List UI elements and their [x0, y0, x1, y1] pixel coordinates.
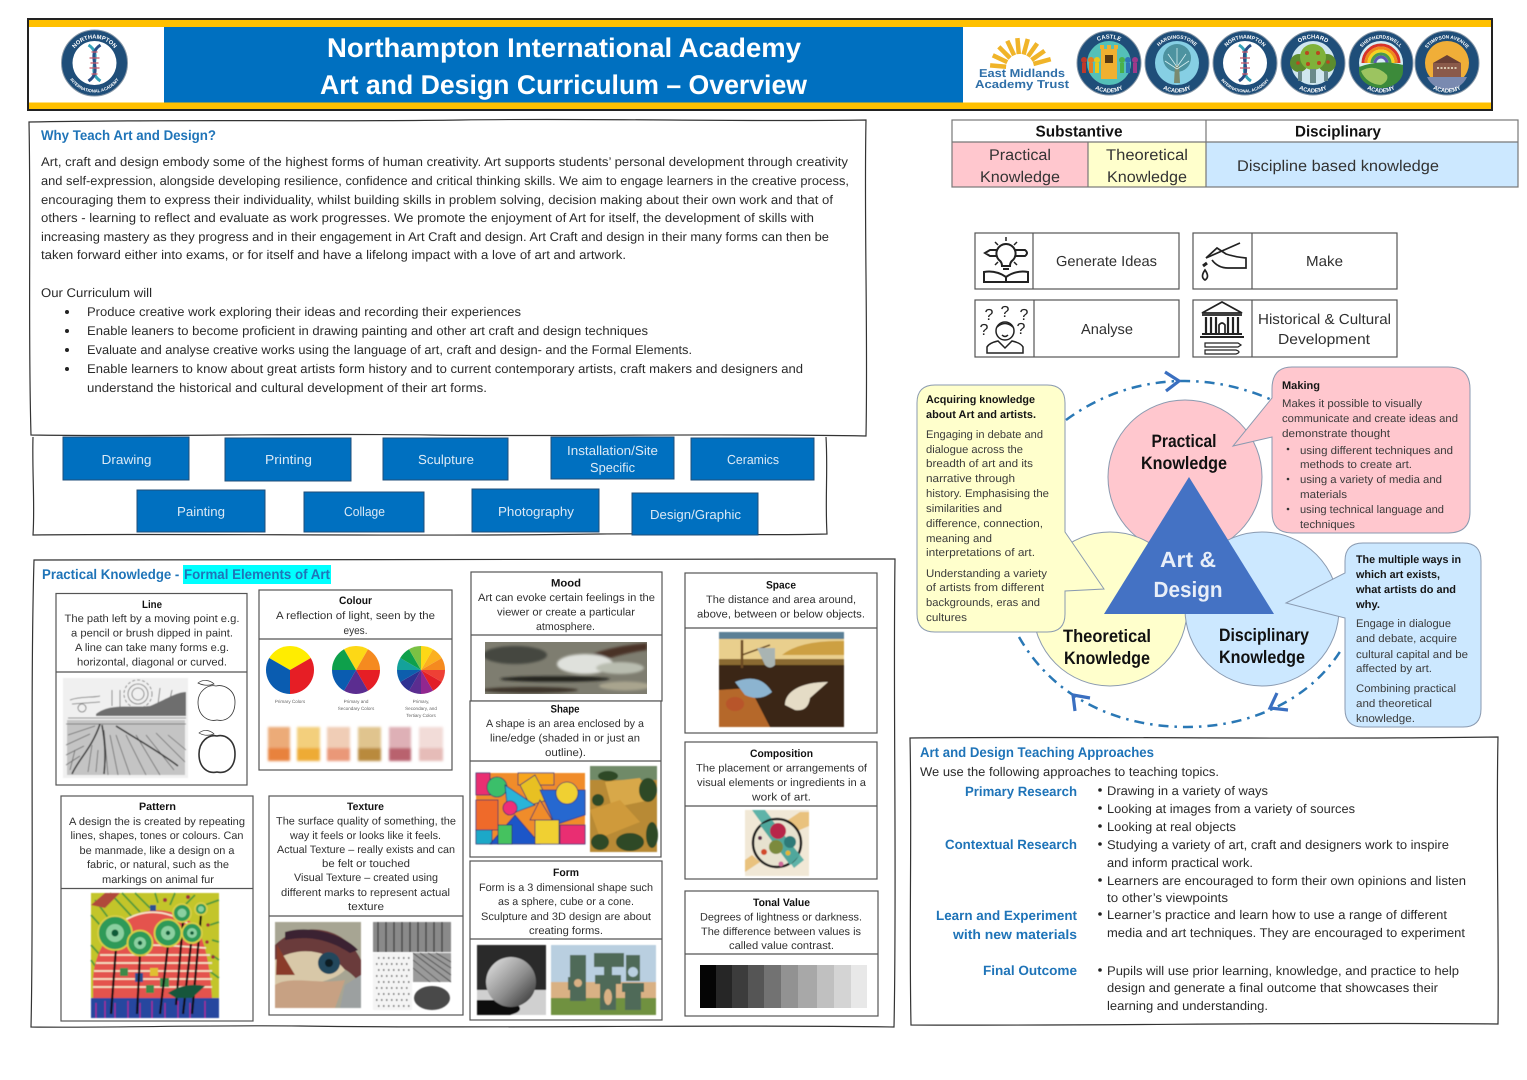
logo: Shepherdswell Academy	[1348, 30, 1414, 96]
card: mood: Art can evoke certain feelings in the	[478, 592, 655, 604]
button: installation/site specific: Installation/Site	[567, 443, 658, 458]
card: texture: be felt or touched	[322, 858, 410, 870]
card: tonal value: Tonal Value	[753, 897, 810, 909]
text block: rationale: and self-expression, alongside developing resilience, confidence and critical thinking skills. We aim to engage learners in the creative process,	[41, 174, 849, 188]
callout: multiple ways art exists: Combining practical	[1356, 683, 1456, 695]
card: space: The distance and area around,	[706, 594, 856, 606]
button: installation/site specific	[551, 437, 674, 479]
panel: generate ideas	[975, 233, 1179, 289]
card: line: A line can take many forms e.g.	[75, 642, 229, 654]
text block: our curriculum will: Enable learners to know about great artists form history and to current contemporary artists, craft makers and designers and	[87, 362, 803, 376]
card: tonal value	[685, 891, 878, 1016]
callout: acquiring knowledge: similarities and	[926, 503, 1002, 515]
button: design/graphic	[632, 493, 758, 535]
callout: making: Making	[1282, 380, 1320, 392]
image: bronze sculpture group in field	[551, 945, 656, 1015]
text block: rationale: others - learning to reflect and evaluate as work progresses. We promote the enjoyment of Art for itself, the development of skills with	[41, 211, 814, 225]
callout: making: methods to create art.	[1300, 459, 1412, 471]
title	[320, 33, 808, 100]
triangle: art and design: Art &	[1160, 547, 1216, 572]
callout: acquiring knowledge	[917, 385, 1104, 632]
logo: East Midlands Academy Trust: Academy Trust	[975, 79, 1069, 91]
triangle: art and design	[1104, 477, 1274, 614]
table: knowledge types: Disciplinary	[1295, 124, 1381, 140]
text block: rationale: increasing mastery as they progress and in their engagement in Art Craft and design. Art Craft and design in their many forms can then be	[41, 230, 829, 244]
card: line: a pencil or brush dipped in paint.	[71, 628, 233, 640]
callout: making: techniques	[1300, 519, 1356, 531]
colour wheel captions: Primary Colors	[275, 699, 306, 704]
card: line: horizontal, diagonal or curved.	[77, 656, 227, 668]
callout: acquiring knowledge: backgrounds, eras and	[926, 597, 1040, 609]
logo: Northampton Academy	[1212, 30, 1278, 96]
button: ceramics: Ceramics	[727, 452, 779, 467]
heading: formal elements: Formal Elements of Art	[184, 566, 330, 582]
card: pattern: markings on animal fur	[102, 874, 214, 886]
approach descriptions: Learner’s practice and learn how to use a range of different	[1107, 908, 1448, 922]
image: apple outlines	[198, 680, 235, 772]
card: texture	[269, 796, 463, 1015]
card: mood: viewer or create a particular	[497, 606, 635, 618]
callout: multiple ways art exists: affected by art.	[1356, 663, 1432, 675]
image: stormy seascape painting	[482, 642, 651, 694]
panel: make: Make	[1306, 254, 1343, 270]
button: installation/site specific: Specific	[590, 460, 635, 475]
panel: art forms	[33, 437, 827, 535]
approach descriptions	[1098, 784, 1466, 1013]
button: printing	[225, 438, 351, 481]
button: drawing: Drawing	[102, 452, 152, 467]
card: form: as a sphere, cube or a cone.	[498, 896, 634, 908]
button: printing: Printing	[265, 452, 312, 467]
circle: theoretical knowledge: Knowledge	[1064, 648, 1150, 668]
image: pencil colour swatches	[268, 727, 443, 761]
text block: our curriculum will: Our Curriculum will	[41, 286, 152, 300]
callout: multiple ways art exists: and debate, acquire	[1356, 633, 1457, 645]
button: design/graphic: Design/Graphic	[650, 507, 741, 522]
table: knowledge types: Theoretical	[1106, 147, 1188, 164]
panel: historical and cultural development	[1193, 300, 1397, 357]
logo: Northampton Academy: INTERNATIONAL ACADEMY	[1221, 78, 1268, 92]
text: introduction: We use the following approaches to teaching topics.	[920, 765, 1219, 779]
icon: primary colour wheel	[266, 646, 314, 694]
icon: secondary colour wheel	[332, 646, 380, 694]
callout: multiple ways art exists: and theoretical	[1356, 698, 1432, 710]
image: colourful abstract shapes	[476, 773, 585, 844]
card: mood	[471, 572, 662, 701]
table: knowledge types: Substantive	[1036, 124, 1123, 140]
callout: acquiring knowledge: Acquiring knowledge	[926, 394, 1035, 406]
icon: thinking person with question marks	[980, 304, 1029, 353]
logo: Hardingstone Academy: HARDINGSTONE	[1156, 35, 1198, 46]
callout: acquiring knowledge: of artists from different	[926, 582, 1044, 594]
callout: making: demonstrate thought	[1282, 428, 1390, 440]
logo: Orchard Academy	[1280, 30, 1346, 96]
card: pattern	[61, 796, 253, 1021]
callout: multiple ways art exists: what artists do and	[1355, 584, 1456, 596]
card: pattern: A design the is created by repeating	[69, 816, 245, 828]
logo: Northampton International Academy: INTERNATIONAL ACADEMY	[70, 78, 118, 92]
button: photography	[472, 489, 599, 532]
text block: rationale	[41, 155, 849, 262]
circle: disciplinary knowledge: Disciplinary	[1219, 625, 1309, 645]
button: collage	[304, 492, 424, 532]
approach descriptions: learning and understanding.	[1107, 999, 1268, 1013]
title: Northampton International Academy	[327, 33, 801, 63]
card: mood: Mood	[551, 578, 581, 590]
card: pattern: Pattern	[139, 801, 176, 813]
approach descriptions: media and art techniques. They are encouraged to experiment	[1107, 926, 1466, 940]
card: form: Form	[553, 867, 579, 879]
approach descriptions: Looking at real objects	[1107, 820, 1236, 834]
card: composition: The placement or arrangements of	[696, 762, 868, 774]
callout: acquiring knowledge: meaning and	[926, 533, 992, 545]
button: sculpture	[383, 438, 508, 480]
approach labels: Final Outcome	[983, 963, 1077, 978]
icon: lightbulb, pencil and open book	[984, 237, 1028, 282]
circle: theoretical knowledge: Theoretical	[1063, 626, 1151, 646]
image: cubist landscape painting	[590, 766, 658, 852]
approach descriptions: and inform practical work.	[1107, 856, 1253, 870]
logo: Stimpson Avenue Academy: STIMPSON AVENUE	[1425, 35, 1470, 48]
card: mood: atmosphere.	[536, 621, 595, 633]
approach labels: Contextual Research	[945, 837, 1077, 852]
image: line sketch landscape	[63, 678, 188, 778]
callout: multiple ways art exists: The multiple ways in	[1356, 554, 1461, 566]
text block: our curriculum will: understand the historical and cultural development of their art forms.	[87, 381, 487, 395]
card: shape: A shape is an area enclosed by a	[486, 718, 644, 730]
approach labels: Primary Research	[965, 784, 1077, 799]
text block: rationale: encouraging them to express their individuality, whilst building skills in problem solving, decision making about their own work and that of	[41, 193, 834, 207]
button: painting	[137, 490, 265, 532]
circle: practical knowledge	[1108, 400, 1262, 554]
logo: East Midlands Academy Trust: East Midlands	[979, 68, 1065, 80]
table: knowledge types	[952, 120, 1518, 187]
card: texture: The surface quality of something, the	[276, 816, 456, 828]
panel: art and design teaching approaches	[910, 737, 1498, 1025]
icon: hand with brush and paint drop	[1202, 243, 1246, 280]
callout: making: using different techniques and	[1300, 445, 1453, 457]
callout: making: communicate and create ideas and	[1282, 413, 1458, 425]
diagram: art and design knowledge	[917, 367, 1481, 727]
icon: museum with pencil	[1200, 302, 1244, 354]
button: painting: Painting	[177, 504, 225, 519]
approach labels	[936, 784, 1078, 978]
panel: why teach art and design	[29, 119, 867, 436]
approach descriptions: Pupils will use prior learning, knowledge, and practice to help	[1107, 964, 1459, 978]
card: colour: Colour	[339, 595, 373, 607]
card: pattern: fabric, or natural, such as the	[87, 859, 229, 871]
card: composition: visual elements or ingredients in a	[697, 777, 866, 789]
callout: acquiring knowledge: breadth of art and its	[926, 458, 1034, 470]
circle: practical knowledge: Practical	[1152, 431, 1216, 451]
card: shape: Shape	[550, 704, 580, 716]
callout: making: using a variety of media and	[1300, 474, 1442, 486]
card: composition: work of art.	[751, 792, 811, 804]
card: texture: texture	[348, 901, 384, 913]
text block: rationale: taken forward either into exams, or for itself and have a lifelong impact with a love of art and artwork.	[41, 248, 626, 262]
callout: acquiring knowledge: narrative through	[926, 473, 1015, 485]
panel: analyse	[975, 300, 1179, 357]
card: tonal value: The difference between values is	[701, 926, 862, 938]
logo: Northampton Academy: NORTHAMPTON	[1224, 34, 1266, 47]
logo: East Midlands Academy Trust	[975, 38, 1069, 91]
header banner	[27, 18, 1493, 111]
colour wheel captions: Tertiary Colors	[406, 713, 437, 718]
heading: formal elements: Practical Knowledge -	[42, 566, 183, 582]
table: knowledge types: Discipline based knowledge	[1237, 158, 1439, 175]
panel: generate ideas: Generate Ideas	[1056, 254, 1157, 270]
button: collage: Collage	[344, 504, 385, 519]
card: form: Sculpture and 3D design are about	[481, 911, 651, 923]
text block: our curriculum will	[41, 286, 803, 395]
colour wheel captions: Secondary Colors	[338, 706, 375, 711]
card: tonal value: called value contrast.	[729, 940, 834, 952]
card: space: above, between or below objects.	[697, 608, 865, 620]
card: form	[470, 861, 662, 1020]
callout: multiple ways art exists: knowledge.	[1356, 713, 1415, 725]
approach descriptions: design and generate a final outcome that showcases their	[1107, 981, 1438, 995]
button: photography: Photography	[498, 504, 575, 519]
card: form: Form is a 3 dimensional shape such	[479, 882, 653, 894]
card: line: The path left by a moving point e.g.	[64, 613, 240, 625]
callout: acquiring knowledge: history. Emphasising the	[926, 488, 1049, 500]
button: ceramics	[691, 438, 814, 480]
logo: Castle Academy: ACADEMY	[1095, 85, 1122, 92]
callout: multiple ways art exists: cultural capital and be	[1356, 649, 1468, 661]
heading: formal elements	[42, 565, 331, 584]
button: sculpture: Sculpture	[418, 452, 474, 467]
logo: Castle Academy: CASTLE	[1097, 34, 1122, 41]
image: circle abstract painting	[745, 810, 809, 876]
callout: multiple ways art exists	[1286, 543, 1481, 727]
triangle: art and design: Design	[1154, 577, 1222, 602]
card: colour	[259, 590, 452, 770]
card: colour: eyes.	[344, 625, 368, 637]
callout: multiple ways art exists: why.	[1355, 599, 1380, 611]
circle: disciplinary knowledge	[1185, 532, 1339, 686]
approach descriptions: Looking at images from a variety of sources	[1107, 802, 1355, 816]
icon: thinking person with question marks: ?	[1020, 307, 1029, 324]
icon: thinking person with question marks: ?	[985, 307, 994, 324]
panel: historical and cultural development: Historical & Cultural	[1258, 312, 1391, 328]
card: texture: Texture	[347, 801, 384, 813]
callout: making: materials	[1300, 489, 1348, 501]
callout: acquiring knowledge: about Art and artists.	[926, 409, 1036, 421]
text block: rationale: Art, craft and design embody some of the highest forms of human creativity. Art supports students’ personal development through creativity	[41, 155, 849, 169]
callout: acquiring knowledge: dialogue across the	[926, 444, 1023, 456]
callout: making: Makes it possible to visually	[1282, 398, 1423, 410]
logo: Stimpson Avenue Academy: ACADEMY	[1433, 85, 1460, 92]
circle: practical knowledge: Knowledge	[1141, 453, 1227, 473]
colour wheel captions: Primary,	[413, 699, 429, 704]
callout: acquiring knowledge: cultures	[926, 612, 968, 624]
button: drawing	[63, 437, 189, 480]
icon: thinking person with question marks: ?	[1001, 304, 1010, 321]
icon: thinking person with question marks: ?	[1017, 321, 1026, 338]
text block: our curriculum will: Produce creative work exploring their ideas and recording their experiences	[87, 305, 521, 319]
circle: disciplinary knowledge: Knowledge	[1219, 647, 1305, 667]
card: form: creating forms.	[529, 925, 603, 937]
callout: multiple ways art exists: Engage in dialogue	[1356, 618, 1451, 630]
table: knowledge types: Practical	[989, 147, 1051, 164]
logo: Stimpson Avenue Academy	[1414, 30, 1480, 96]
logo: Orchard Academy: ORCHARD	[1298, 34, 1328, 42]
panel: historical and cultural development: Development	[1278, 332, 1370, 348]
image: shaded sphere drawing	[477, 945, 546, 1015]
card: texture: way it feels or looks like it feels.	[289, 830, 441, 842]
approach descriptions: Learners are encouraged to form their own opinions and listen	[1107, 874, 1466, 888]
logo: Hardingstone Academy	[1144, 30, 1210, 96]
table: knowledge types: Knowledge	[980, 169, 1060, 186]
card: shape: outline).	[545, 747, 586, 759]
title: Art and Design Curriculum – Overview	[320, 70, 808, 100]
colour wheel captions	[275, 699, 437, 718]
card: pattern: be manmade, like a design on a	[80, 845, 234, 857]
card: texture: Visual Texture – created using	[294, 872, 438, 884]
card: pattern: lines, shapes, tones or colours. Can	[70, 830, 244, 842]
panel: practical knowledge formal elements	[31, 559, 895, 1027]
card: texture: different marks to represent actual	[281, 887, 450, 899]
image: melting clocks painting	[719, 632, 844, 727]
heading: teaching approaches: Art and Design Teaching Approaches	[920, 744, 1154, 760]
callout: acquiring knowledge: interpretations of art.	[926, 547, 1035, 559]
card: texture: Actual Texture – really exists and can	[277, 844, 455, 856]
card: tonal value: Degrees of lightness or darkness.	[700, 912, 862, 924]
image: impasto eye painting	[275, 922, 361, 1008]
card: shape	[470, 701, 661, 857]
panel: analyse: Analyse	[1081, 322, 1133, 338]
card: shape: line/edge (shaded in or just an	[490, 732, 640, 744]
arrow: cycle top	[1066, 372, 1272, 420]
card: space	[685, 573, 877, 733]
colour wheel captions: Primary and	[344, 699, 369, 704]
text block: our curriculum will: Enable leaners to become proficient in drawing painting and other art craft and design techniques	[87, 324, 648, 338]
card: composition	[685, 742, 877, 879]
logo: Orchard Academy: ACADEMY	[1299, 85, 1326, 92]
image: texture samples	[373, 922, 451, 1010]
callout: making	[1233, 367, 1470, 533]
circle: theoretical knowledge	[1033, 532, 1187, 686]
approach labels: with new materials	[952, 927, 1077, 942]
approach labels: Learn and Experiment	[936, 908, 1078, 923]
icon: thinking person with question marks: ?	[980, 322, 989, 339]
logo: Shepherdswell Academy: SHEPHERDSWELL	[1360, 35, 1402, 48]
card: line: Line	[142, 599, 162, 611]
logo: Northampton International Academy: NORTHAMPTON	[72, 34, 118, 48]
card: colour: A reflection of light, seen by the	[276, 610, 435, 622]
card: space: Space	[766, 580, 796, 592]
panel: make	[1193, 233, 1397, 289]
chart: tonal gradient scale	[700, 965, 867, 1008]
card: composition: Composition	[750, 748, 813, 760]
callout: acquiring knowledge: Engaging in debate and	[926, 429, 1043, 441]
approach descriptions: to other’s viewpoints	[1107, 891, 1228, 905]
icon: tertiary colour wheel	[397, 646, 445, 694]
card: line	[56, 594, 247, 785]
logo: Shepherdswell Academy: ACADEMY	[1367, 85, 1394, 92]
logo: Northampton International Academy	[61, 30, 128, 96]
approach descriptions: Drawing in a variety of ways	[1107, 784, 1268, 798]
approach descriptions: Studying a variety of art, craft and designers work to inspire	[1107, 838, 1449, 852]
arrow: cycle bottom	[1019, 637, 1341, 727]
callout: multiple ways art exists: which art exists,	[1355, 569, 1440, 581]
table: knowledge types: Knowledge	[1107, 169, 1187, 186]
callout: acquiring knowledge: difference, connection,	[926, 518, 1043, 530]
text block: our curriculum will: Evaluate and analyse creative works using the language of art, craft and design- and the Formal Elements.	[87, 343, 692, 357]
callout: making: using technical language and	[1300, 504, 1444, 516]
image: pattern painting with trees	[91, 893, 219, 1018]
logo: Castle Academy	[1076, 30, 1142, 96]
logo: Hardingstone Academy: ACADEMY	[1163, 85, 1190, 92]
callout: acquiring knowledge: Understanding a variety	[926, 568, 1048, 580]
heading: why teach: Why Teach Art and Design?	[41, 127, 216, 143]
colour wheel captions: Secondary, and	[405, 706, 437, 711]
